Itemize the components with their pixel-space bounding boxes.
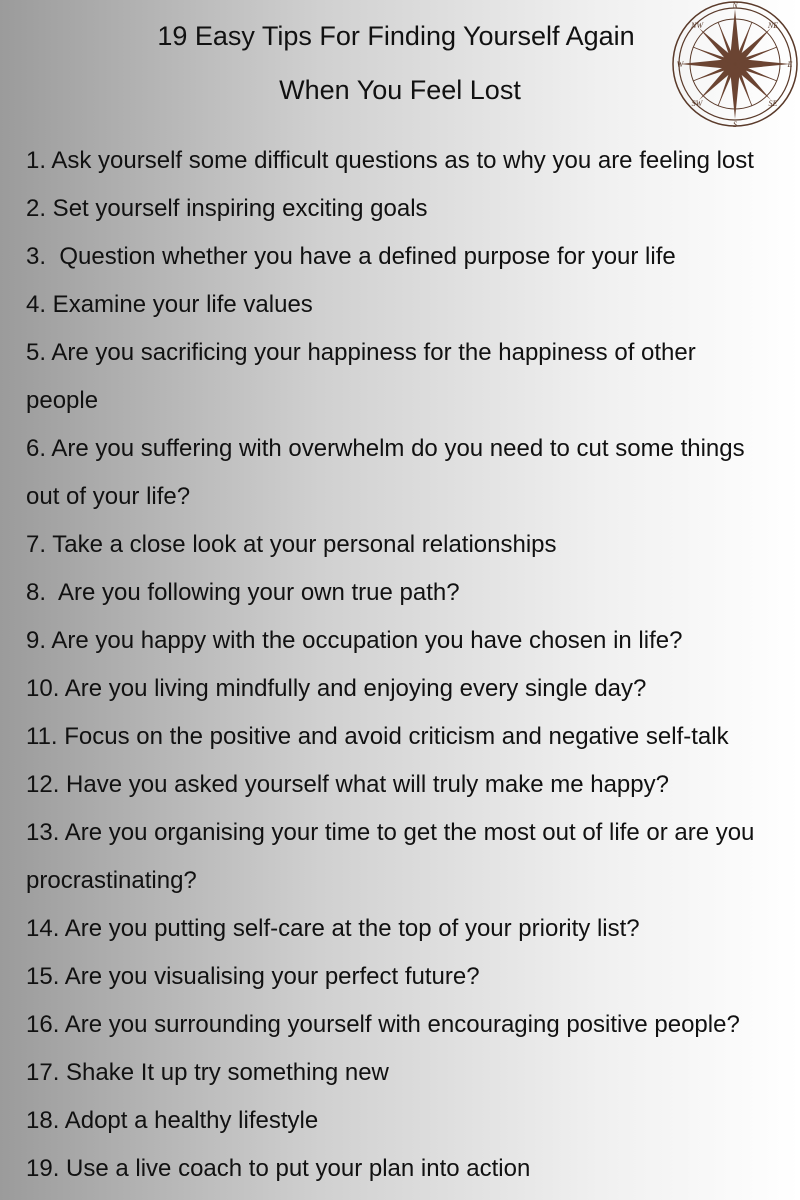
tips list: 10. Are you living mindfully and enjoying every single day? (26, 675, 646, 702)
tips list: 2. Set yourself inspiring exciting goals (26, 195, 428, 222)
tips list: 14. Are you putting self-care at the top of your priority list? (26, 915, 640, 942)
tips list: people (26, 387, 98, 414)
icon: compass: E (787, 60, 793, 69)
icon: compass: SE (769, 99, 778, 108)
icon: compass: SW (692, 99, 704, 108)
tips list: 17. Shake It up try something new (26, 1059, 389, 1086)
title: 19 Easy Tips For Finding Yourself Again (157, 21, 635, 51)
tips list: out of your life? (26, 483, 190, 510)
tips list: 5. Are you sacrificing your happiness for the happiness of other (26, 339, 696, 366)
subtitle: When You Feel Lost (279, 75, 521, 105)
tips list: 19. Use a live coach to put your plan into action (26, 1155, 530, 1182)
icon: compass: W (677, 60, 685, 69)
tips list: 9. Are you happy with the occupation you have chosen in life? (26, 627, 682, 654)
tips list: 11. Focus on the positive and avoid criticism and negative self-talk (26, 723, 729, 750)
tips list: 8. Are you following your own true path? (26, 579, 460, 606)
tips list: 3. Question whether you have a defined purpose for your life (26, 243, 676, 270)
icon: compass: NE (767, 21, 778, 30)
tips list: 16. Are you surrounding yourself with encouraging positive people? (26, 1011, 740, 1038)
tips list: 6. Are you suffering with overwhelm do you need to cut some things (26, 435, 745, 462)
tips list: 12. Have you asked yourself what will truly make me happy? (26, 771, 669, 798)
tips list: 1. Ask yourself some difficult questions as to why you are feeling lost (26, 147, 754, 174)
icon: compass: NW (690, 21, 704, 30)
tips list: 13. Are you organising your time to get the most out of life or are you (26, 819, 754, 846)
icon: compass: N (731, 1, 738, 10)
tips list: 7. Take a close look at your personal relationships (26, 531, 557, 558)
tips list: 18. Adopt a healthy lifestyle (26, 1107, 318, 1134)
tips list: 15. Are you visualising your perfect future? (26, 963, 480, 990)
icon: compass (672, 1, 798, 128)
tips list: procrastinating? (26, 867, 197, 894)
tips list: 4. Examine your life values (26, 291, 313, 318)
